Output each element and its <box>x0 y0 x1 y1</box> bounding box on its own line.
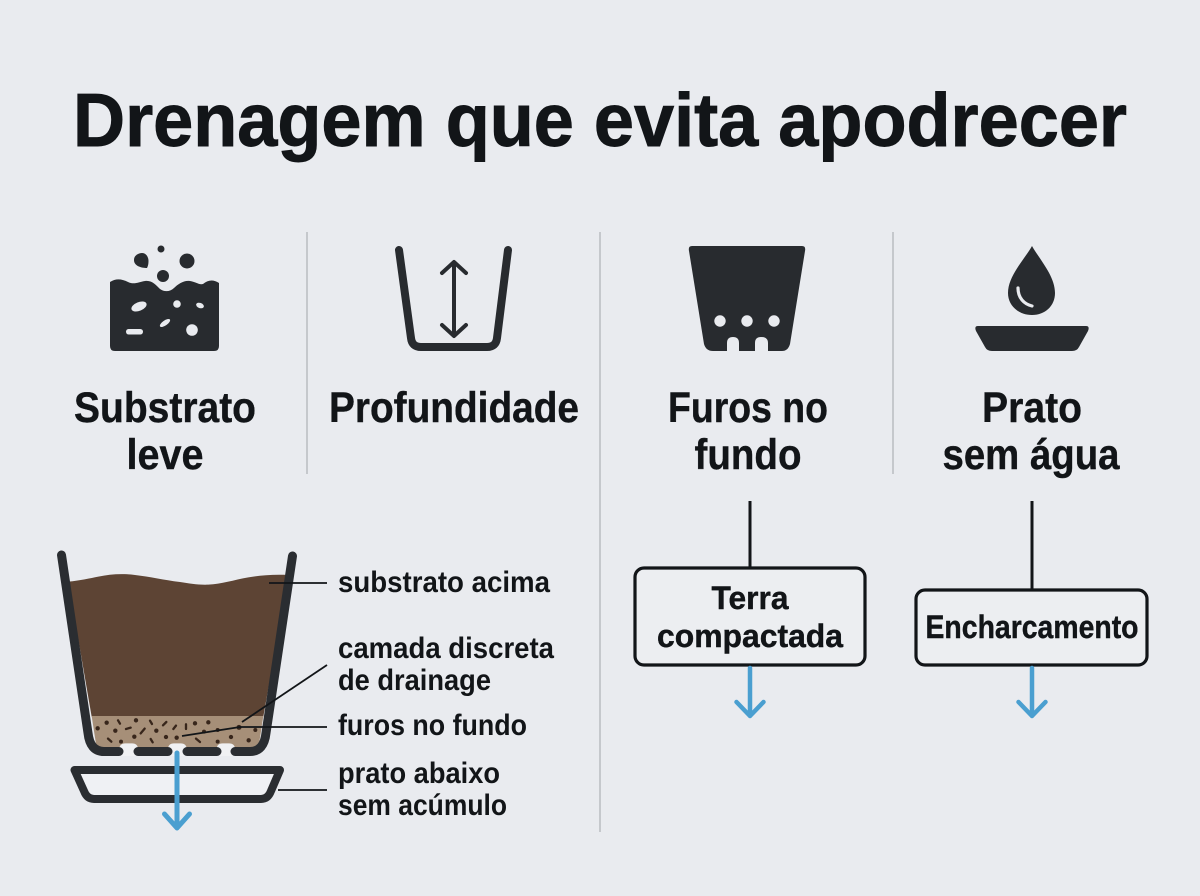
heading: Profundidade: Profundidade <box>329 384 579 432</box>
label: camada discreta de drainage: de drainage <box>338 664 491 697</box>
label: prato abaixo sem acumulo: prato abaixo <box>338 757 500 790</box>
label: camada discreta de drainage: camada discreta <box>338 632 554 665</box>
leader lines <box>182 583 327 790</box>
icon: substrate <box>110 246 219 351</box>
icon: pot depth <box>399 250 508 347</box>
column: substrato leve <box>74 246 256 479</box>
arrow: down <box>736 668 764 716</box>
icon: water drop and saucer <box>975 246 1089 351</box>
drainage layer <box>92 716 263 748</box>
callout: Encharcamento <box>916 590 1147 665</box>
icon: pot with holes <box>689 246 805 351</box>
drain holes <box>119 743 235 756</box>
saucer <box>74 770 280 799</box>
diagram: pot cross-section <box>62 555 554 828</box>
callout: Terra compactada: Terra <box>712 580 789 616</box>
column: prato sem agua: sem água <box>942 431 1120 479</box>
heading: Substrato leve: Substrato <box>74 384 256 432</box>
label: prato abaixo sem acumulo <box>338 757 507 822</box>
heading: Furos no fundo: Furos no <box>668 384 828 432</box>
callout: Encharcamento: Encharcamento <box>926 609 1138 645</box>
callout: Terra compactada <box>635 568 865 665</box>
arrow: down <box>1018 668 1046 716</box>
label: furos no fundo: furos no fundo <box>338 709 527 742</box>
column: furos no fundo <box>635 246 865 716</box>
arrow: drainage <box>164 753 190 828</box>
heading: Prato sem agua: Prato <box>982 384 1082 432</box>
label: prato abaixo sem acumulo: sem acúmulo <box>338 789 507 822</box>
label: camada discreta de drainage <box>338 632 554 697</box>
label: substrato acima: substrato acima <box>338 566 550 599</box>
connector <box>1030 501 1034 590</box>
column: substrato leve: leve <box>126 431 204 479</box>
column: furos no fundo: fundo <box>694 431 802 479</box>
column: prato sem agua <box>916 246 1147 716</box>
column: profundidade <box>329 250 579 432</box>
title: Drenagem que evita apodrecer <box>73 78 1127 162</box>
pot wall <box>62 555 292 752</box>
soil <box>68 574 288 717</box>
connector <box>748 501 752 568</box>
callout: Terra compactada: compactada <box>657 618 844 654</box>
